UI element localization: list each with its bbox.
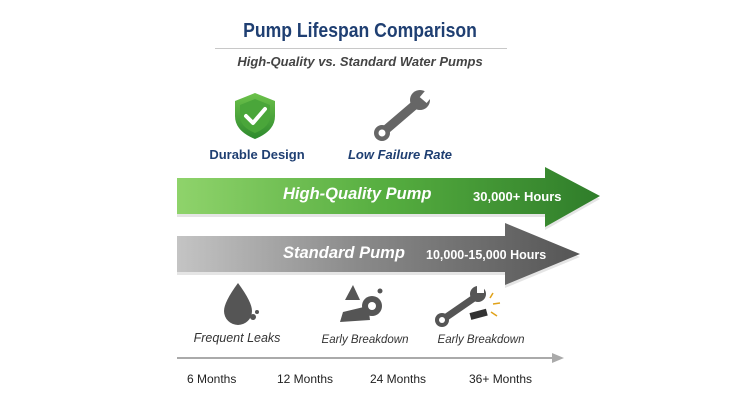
label: durable design: Durable Design xyxy=(209,147,305,162)
icon: broken wrench xyxy=(435,284,500,327)
label: early breakdown 2: Early Breakdown xyxy=(438,334,524,346)
timeline axis xyxy=(177,353,564,363)
arrow text: high-quality: High-Quality Pump xyxy=(283,185,432,203)
arrow: standard xyxy=(177,223,580,288)
timeline labels xyxy=(187,372,532,386)
timeline labels: 24 Months xyxy=(370,372,426,386)
timeline labels: 6 Months xyxy=(187,372,236,386)
icon: breakdown xyxy=(340,285,382,322)
icon: wrench xyxy=(374,88,434,141)
label: early breakdown 1: Early Breakdown xyxy=(322,334,408,346)
label: frequent leaks: Frequent Leaks xyxy=(194,331,280,345)
label: low failure rate: Low Failure Rate xyxy=(348,147,452,162)
text: 10,000-15,000 Hours xyxy=(426,248,546,262)
subtitle: High-Quality vs. Standard Water Pumps xyxy=(237,54,483,69)
arrow text: standard: Standard Pump xyxy=(283,244,405,262)
text: 30,000+ Hours xyxy=(473,189,562,204)
icon: shield xyxy=(235,93,275,139)
timeline labels: 12 Months xyxy=(277,372,333,386)
timeline labels: 36+ Months xyxy=(469,372,532,386)
icon: drop xyxy=(224,283,259,325)
arrow: high-quality xyxy=(177,167,600,230)
title: Pump Lifespan Comparison xyxy=(243,20,477,42)
